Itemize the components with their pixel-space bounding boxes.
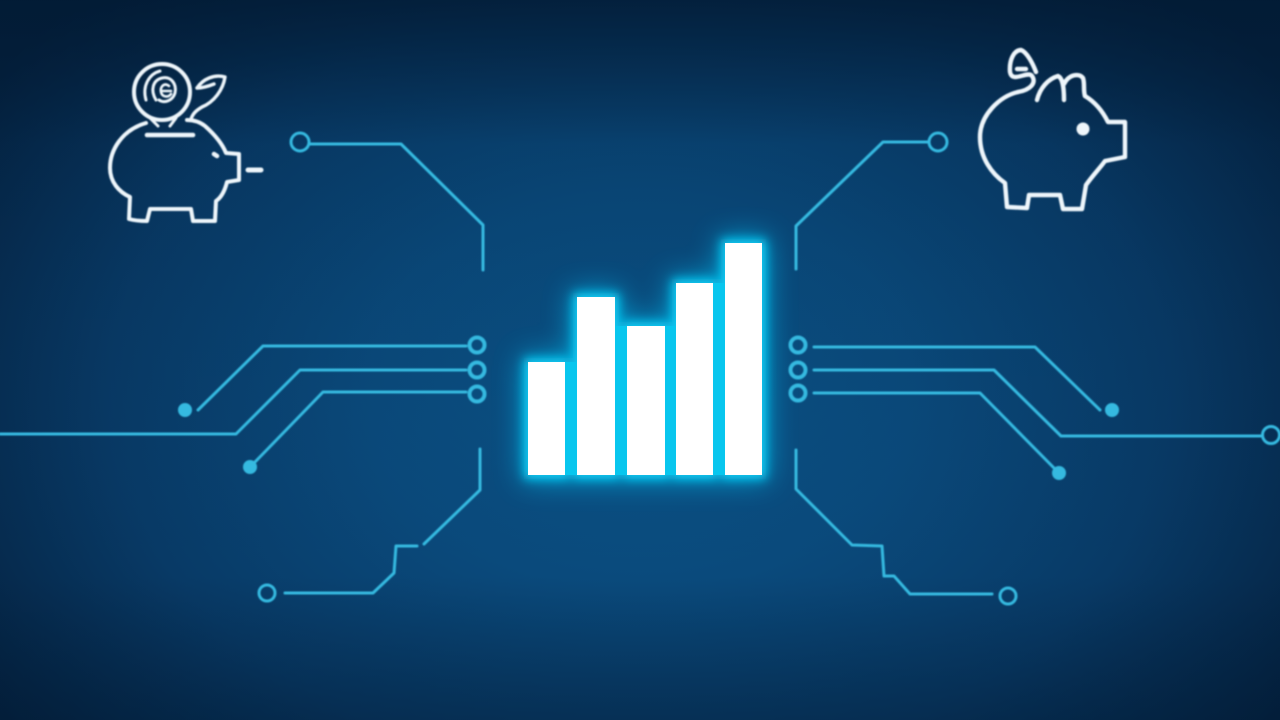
- pig eye: [214, 154, 217, 156]
- icon: piggy bank with coin: [110, 64, 261, 221]
- top right trace: [796, 133, 947, 269]
- bar 1: [528, 362, 565, 475]
- bar 2: [577, 297, 615, 475]
- bar chart: [522, 237, 768, 481]
- top left trace: [291, 133, 483, 270]
- long trace from left edge: [0, 362, 484, 434]
- upper trace: [790, 338, 1118, 416]
- long trace to right edge: [790, 362, 1280, 444]
- lower trace: [790, 386, 1064, 478]
- bar 5: [725, 243, 762, 475]
- coin slot: [147, 133, 193, 137]
- pig eye: [1076, 122, 1090, 136]
- right circuit traces: [790, 133, 1280, 604]
- glow between bars: [565, 283, 725, 475]
- upper trace: [180, 338, 484, 416]
- tail curl: [1010, 50, 1036, 92]
- ears: [1037, 75, 1085, 100]
- pig body: [980, 92, 1125, 209]
- bottom right trace: [796, 450, 1016, 604]
- left circuit traces: [0, 133, 484, 601]
- tight bar glow: [524, 239, 766, 479]
- motion dash: [248, 168, 261, 172]
- bar 4: [676, 283, 713, 475]
- wide bar halo: [522, 237, 768, 481]
- bar 3: [627, 326, 665, 475]
- bottom left trace: [259, 449, 480, 601]
- icon: piggy bank with tail: [980, 50, 1125, 209]
- coin: [134, 64, 190, 126]
- lower trace: [244, 386, 484, 472]
- pig body: [110, 120, 239, 221]
- leaf: [191, 76, 225, 119]
